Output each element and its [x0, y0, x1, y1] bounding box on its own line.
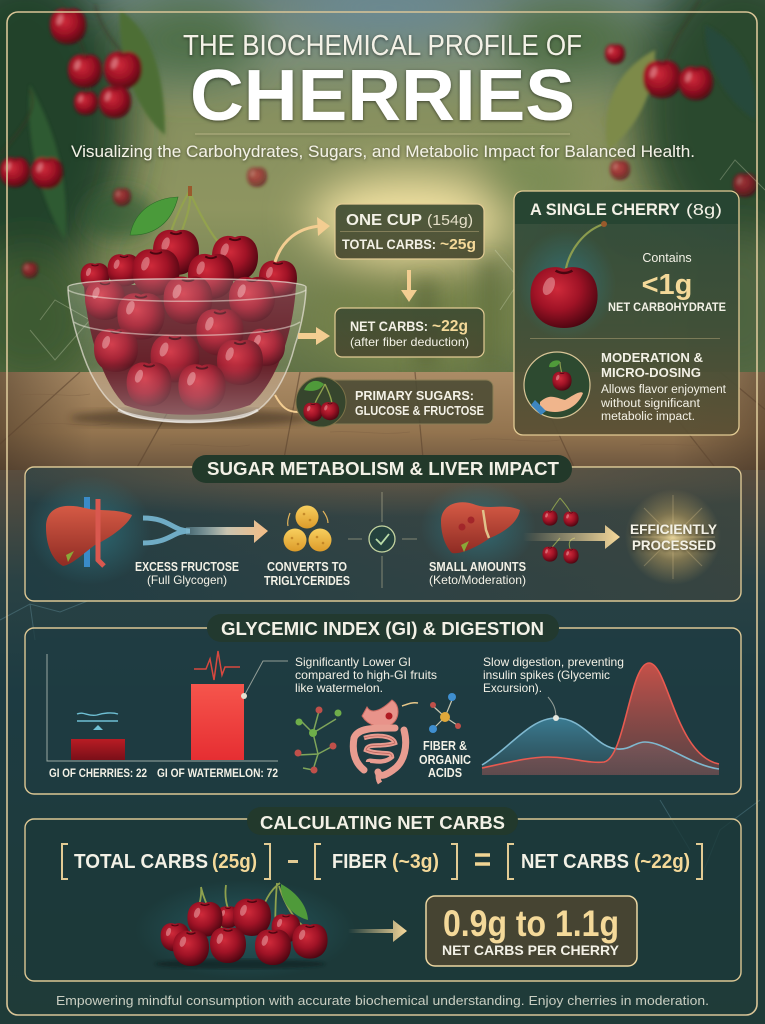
label: small amounts: SMALL AMOUNTS	[429, 560, 526, 574]
panel: a single cherry: MODERATION &	[601, 350, 703, 365]
panel: one cup: ONE CUP	[346, 212, 422, 229]
label: small amounts: (Keto/Moderation)	[429, 573, 526, 587]
callout: lower GI: compared to high-GI fruits	[295, 668, 437, 682]
label: excess fructose: EXCESS FRUCTOSE	[135, 560, 239, 574]
heading: sugar metabolism	[192, 455, 572, 483]
arrow: down to net carbs	[401, 270, 417, 302]
callout: net carbs per cherry	[426, 896, 637, 966]
panel: a single cherry: Allows flavor enjoyment	[601, 384, 727, 396]
label: fiber and organic acids	[419, 739, 471, 780]
heading: calculating net carbs: CALCULATING NET CARBS	[260, 813, 505, 833]
panel: primary sugars: PRIMARY SUGARS:	[355, 389, 474, 403]
footer text: Empowering mindful consumption with accurate biochemical understanding. Enjoy cherries in moderation.	[56, 993, 709, 1008]
label: fiber and organic acids: ORGANIC	[419, 753, 471, 767]
panel: sugar metabolism and liver impact	[25, 455, 741, 601]
panel: a single cherry: NET CARBOHYDRATE	[608, 300, 726, 314]
icon: triglyceride globules	[284, 506, 332, 552]
arrow: efficient processing	[523, 525, 620, 549]
label: fiber and organic acids: ACIDS	[428, 766, 462, 780]
panel: a single cherry: Contains	[642, 251, 692, 265]
heading: calculating net carbs	[247, 807, 518, 835]
label: triglycerides	[264, 560, 350, 588]
arrow: digestion to acids	[402, 703, 418, 706]
icon: hand holding cherry	[524, 352, 590, 418]
heading: glycemic index: GLYCEMIC INDEX (GI) & DIGESTION	[221, 619, 544, 639]
label: efficiently processed: EFFICIENTLY	[630, 521, 718, 537]
title: THE BIOCHEMICAL PROFILE OF	[183, 30, 582, 62]
callout: lower GI	[295, 655, 437, 695]
callout: slow digestion: Excursion).	[483, 681, 542, 695]
label: efficiently processed: PROCESSED	[632, 537, 716, 553]
callout: net carbs per cherry: NET CARBS PER CHERRY	[442, 942, 620, 958]
formula: net carbs equation: (~22g)	[634, 851, 690, 873]
panel: net carbs: NET CARBS:	[350, 319, 428, 334]
label: excess fructose: (Full Glycogen)	[147, 573, 227, 587]
panel: net carbs: (after fiber deduction)	[350, 335, 469, 349]
panel: a single cherry: MICRO-DOSING	[601, 365, 701, 380]
callout: slow digestion	[483, 655, 624, 695]
heading: sugar metabolism: SUGAR METABOLISM & LIVER IMPACT	[207, 459, 559, 479]
panel: net carbs: ~22g	[432, 318, 468, 335]
panel: glycemic index and digestion	[25, 614, 741, 794]
callout: slow digestion: insulin spikes (Glycemic	[483, 668, 610, 682]
bar chart: GI comparison: GI OF WATERMELON: 72	[157, 768, 278, 780]
arrow: bowl to net carbs	[298, 327, 330, 345]
panel: one cup: (154g)	[427, 212, 473, 229]
label: triglycerides: CONVERTS TO	[267, 560, 347, 574]
label: excess fructose	[135, 560, 239, 587]
panel: one cup: TOTAL CARBS:	[342, 237, 436, 252]
subtitle: Visualizing the Carbohydrates, Sugars, and Metabolic Impact for Balanced Health.	[71, 143, 695, 161]
panel: net carbs	[335, 308, 484, 357]
chart: glycemic response curves	[482, 663, 719, 775]
bar chart: GI comparison: GI OF CHERRIES: 22	[49, 768, 147, 780]
arrow: fructose flow	[143, 518, 268, 543]
icon: cherry pair	[303, 381, 339, 422]
formula: net carbs equation	[62, 844, 702, 879]
arrow: cherries to result	[348, 920, 407, 942]
panel: calculating net carbs	[25, 807, 741, 981]
panel: a single cherry: metabolic impact.	[601, 411, 695, 423]
panel: one cup: ~25g	[440, 236, 476, 253]
icon: glow burst	[625, 489, 721, 585]
bar chart: GI comparison	[47, 651, 288, 780]
icon: organic acid molecule	[429, 693, 461, 733]
heading: glycemic index	[207, 614, 559, 642]
formula: net carbs equation: FIBER	[332, 851, 388, 873]
formula: net carbs equation: NET CARBS	[521, 851, 629, 873]
icon: liver with vessels	[46, 497, 132, 567]
icon: healthy liver	[441, 502, 520, 553]
title: CHERRIES	[190, 56, 575, 136]
callout: slow digestion: Slow digestion, preventing	[483, 655, 624, 669]
panel: a single cherry: A SINGLE CHERRY	[530, 201, 680, 219]
arrow: bowl to one cup	[275, 217, 330, 262]
formula: net carbs equation: (~3g)	[392, 851, 439, 873]
label: triglycerides: TRIGLYCERIDES	[264, 574, 350, 588]
label: small amounts	[429, 560, 526, 587]
panel: a single cherry: (8g)	[686, 202, 722, 219]
icon: molecule left	[294, 706, 342, 774]
icon: small cherries	[542, 498, 579, 564]
callout: lower GI: like watermelon.	[295, 681, 383, 695]
icon: digestive tract	[353, 700, 406, 783]
label: fiber and organic acids: FIBER &	[423, 739, 467, 753]
panel: a single cherry: <1g	[642, 269, 692, 301]
panel: one cup	[335, 204, 484, 259]
panel: primary sugars	[296, 377, 493, 427]
callout: net carbs per cherry: 0.9g to 1.1g	[443, 903, 619, 944]
icon: single cherry	[530, 221, 607, 328]
glass bowl of cherries	[68, 186, 310, 427]
panel: a single cherry	[514, 191, 739, 435]
callout: lower GI: Significantly Lower GI	[295, 655, 411, 669]
icon: leaf	[130, 197, 178, 235]
panel: primary sugars: GLUCOSE & FRUCTOSE	[355, 404, 484, 418]
icon: cherry cluster	[155, 883, 328, 969]
icon: check mark	[369, 526, 395, 552]
formula: net carbs equation: TOTAL CARBS	[74, 851, 208, 873]
panel: a single cherry: without significant	[600, 398, 701, 410]
formula: net carbs equation: (25g)	[212, 851, 257, 873]
arrow: bowl to primary sugars	[275, 395, 298, 412]
label: efficiently processed	[630, 521, 718, 553]
